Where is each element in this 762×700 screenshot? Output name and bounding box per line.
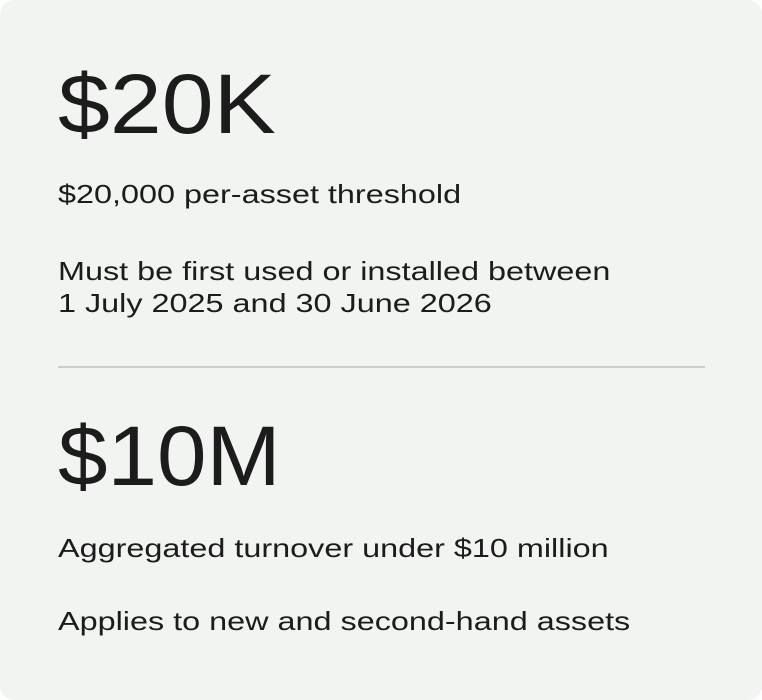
- text: threshold: $20,000 per-asset threshold: [58, 179, 461, 209]
- heading: $10M: $10M: [58, 409, 281, 503]
- text: turnover: Aggregated turnover under $10 million: [58, 533, 609, 563]
- text: date range: 1 July 2025 and 30 June 2026: [58, 288, 492, 318]
- heading: $20K: $20K: [58, 57, 276, 151]
- text: assets: Applies to new and second-hand assets: [58, 606, 630, 636]
- text: date range: [58, 256, 610, 318]
- text: date range: Must be first used or installed between: [58, 256, 610, 286]
